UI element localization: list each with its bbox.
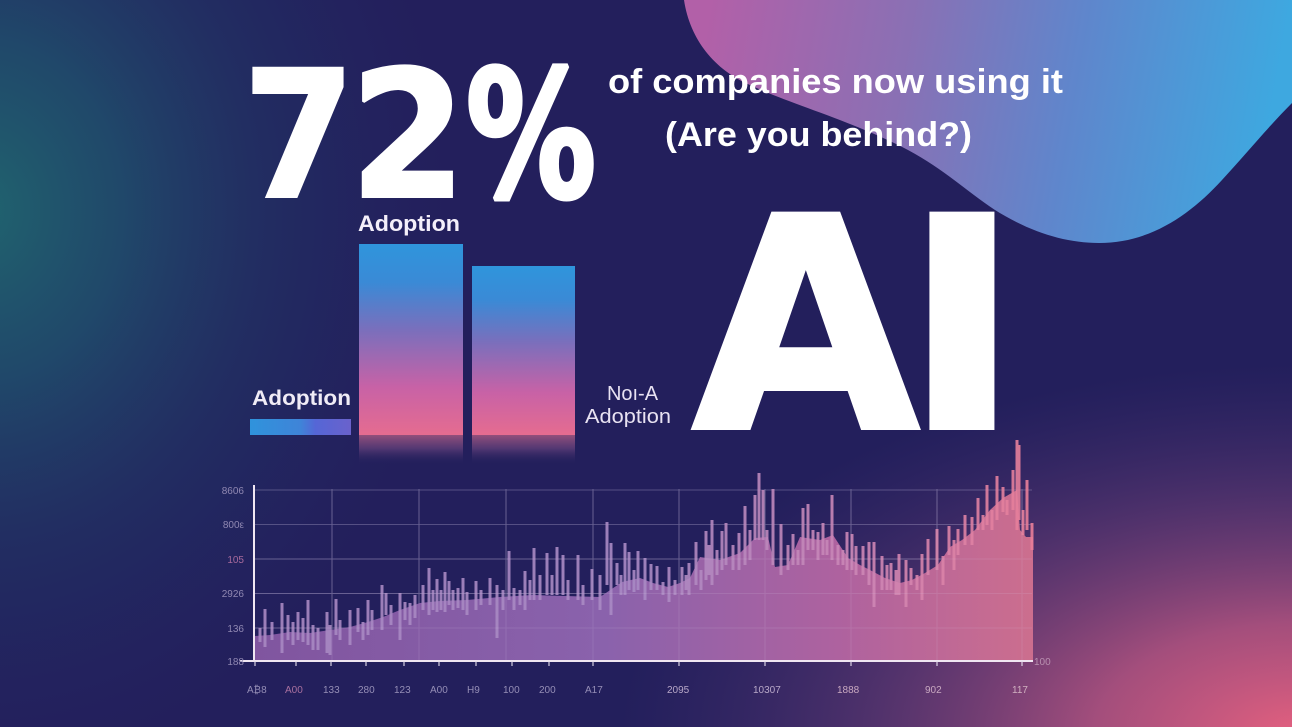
y-axis labels: 2926 — [222, 589, 244, 600]
decorative gradient blob — [684, 0, 1292, 243]
bar: adoption — [359, 244, 463, 465]
big AI wordmark: A — [692, 156, 922, 498]
x-axis labels — [247, 657, 1051, 696]
y-axis labels: 800ε — [223, 520, 245, 531]
subheading: (Are you behind?) — [665, 116, 972, 154]
y-axis labels: 136 — [227, 624, 244, 635]
x-axis labels: 123 — [394, 685, 411, 696]
x-axis labels: 117 — [1012, 685, 1028, 696]
subheading: of companies now using it — [608, 63, 1063, 101]
subheading — [608, 63, 1063, 154]
axis ticks — [255, 661, 1022, 666]
x-axis labels: A₿8 — [247, 684, 267, 696]
legend — [250, 386, 351, 435]
big AI wordmark — [692, 156, 1022, 498]
x-axis labels: A00 — [430, 685, 448, 696]
y-axis labels: 188 — [227, 657, 244, 668]
bar label: Non-AI Adoption — [585, 383, 671, 428]
x-axis labels: A17 — [585, 685, 603, 696]
bar label: Non-AI Adoption: Noı-A — [607, 383, 659, 405]
x-axis labels: A00 — [285, 685, 303, 696]
bar chart: adoption comparison — [358, 211, 671, 465]
x-axis labels: 1888 — [837, 685, 860, 696]
x-axis labels: 200 — [539, 685, 556, 696]
area chart: adoption over time — [222, 440, 1051, 696]
x-axis labels: 133 — [323, 685, 340, 696]
headline stat: 72%: % — [466, 34, 596, 238]
gridlines over the area — [254, 489, 1032, 661]
legend: Adoption — [252, 386, 351, 410]
chart area fill — [255, 490, 1033, 661]
bar: non-AI adoption — [472, 266, 575, 465]
headline stat: 72% — [243, 34, 596, 238]
gridlines behind the area — [254, 489, 1032, 661]
axes — [240, 485, 1033, 661]
bar label: Adoption: Adoption — [358, 211, 460, 236]
x-axis labels: 100 — [503, 685, 520, 696]
bar label: Non-AI Adoption: Adoption — [585, 406, 671, 428]
x-axis labels: H9 — [467, 685, 480, 696]
headline stat: 72%: 7 — [243, 34, 355, 238]
x-axis labels: 100 — [1034, 657, 1051, 668]
x-axis labels: 2095 — [667, 685, 690, 696]
chart spikes — [260, 440, 1032, 655]
x-axis labels: 10307 — [753, 685, 781, 696]
y-axis labels: 8606 — [222, 486, 244, 497]
big AI wordmark: I — [902, 156, 1022, 498]
x-axis labels: 280 — [358, 685, 375, 696]
y-axis labels — [222, 486, 245, 668]
x-axis labels: 902 — [925, 685, 942, 696]
headline stat: 72%: 2 — [350, 34, 466, 238]
y-axis labels: 105 — [227, 555, 244, 566]
